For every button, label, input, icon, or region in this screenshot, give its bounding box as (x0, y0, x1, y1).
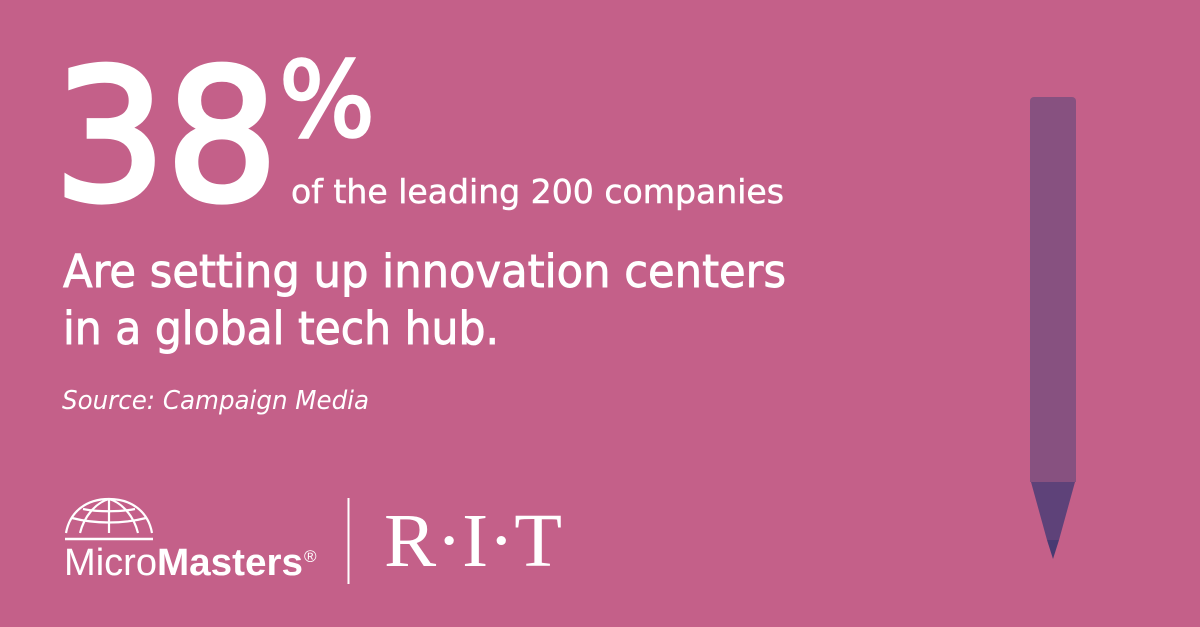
statistic: 38: 38 (54, 31, 278, 242)
pencil tip (1047, 540, 1059, 559)
registered mark: ® (304, 547, 317, 566)
subheading: leading companies: of the leading 200 companies (291, 172, 784, 211)
logo divider (348, 498, 350, 584)
icon: globe dome (65, 499, 153, 539)
logo: MicroMasters (64, 499, 317, 584)
pencil cone (1031, 482, 1075, 540)
pencil body (1030, 97, 1076, 482)
main statement: Are setting up innovation centers (63, 245, 786, 298)
source note: Source: Campaign Media (62, 386, 369, 416)
logo: RIT: R·I·T (384, 499, 562, 583)
wordmark: Masters (157, 542, 303, 584)
main statement (63, 245, 786, 355)
icon: pencil (1030, 97, 1076, 559)
wordmark: Micro (64, 542, 157, 584)
percent sign: % (279, 39, 375, 161)
main statement: in a global tech hub. (63, 302, 499, 355)
